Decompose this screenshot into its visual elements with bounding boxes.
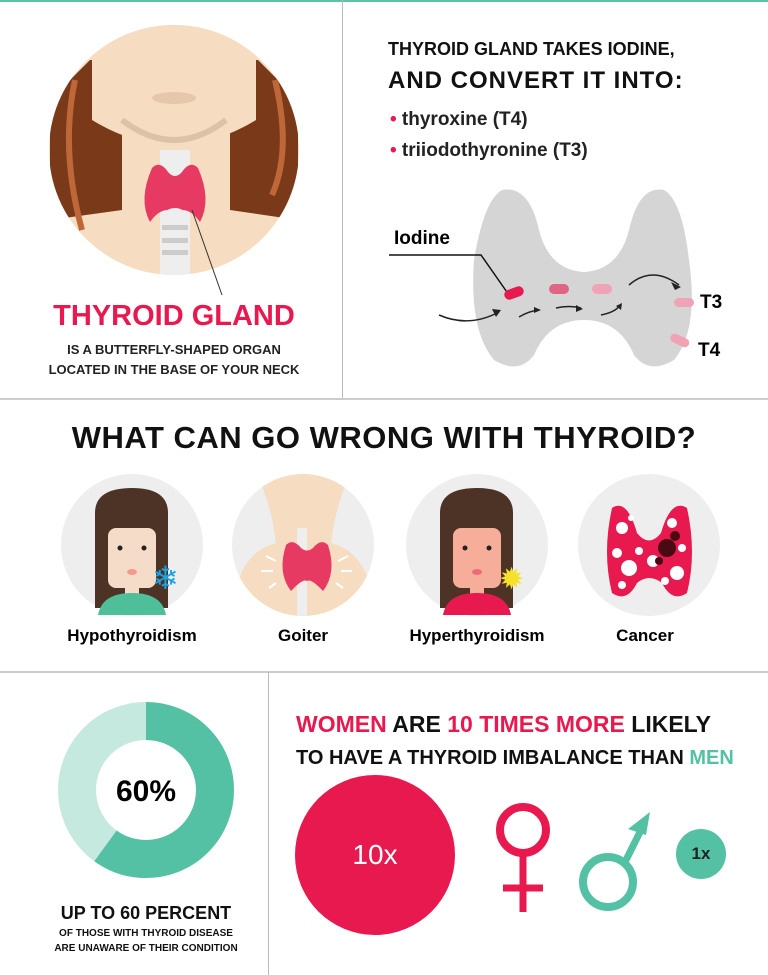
circle: 1x: 1x	[692, 844, 710, 863]
diagram: thyroid conversion: Iodine	[394, 228, 450, 249]
text: up to 60 percent: UP TO 60 PERCENT	[61, 903, 231, 923]
heading: women vs men	[296, 711, 734, 769]
heading: women vs men: TO HAVE A THYROID IMBALANCE THAN MEN	[296, 747, 734, 769]
icon: hypothyroidism	[61, 474, 203, 616]
text: description	[49, 342, 300, 377]
diagram: thyroid conversion: T4	[698, 340, 721, 361]
diagram: thyroid conversion: T3	[700, 292, 722, 313]
circle: 10x: 10x	[352, 839, 398, 870]
label: hyperthyroidism: Hyperthyroidism	[409, 626, 545, 645]
circle: 10x	[295, 775, 455, 935]
icon: hyperthyroidism: ✹	[499, 563, 524, 596]
heading: iodine conversion: AND CONVERT IT INTO:	[388, 67, 684, 94]
bullet list	[390, 109, 588, 161]
icon: female symbol	[496, 803, 550, 912]
diagram: thyroid conversion	[389, 190, 722, 366]
icon: cancer	[578, 474, 720, 616]
heading: iodine conversion	[388, 39, 684, 94]
heading: what can go wrong: WHAT CAN GO WRONG WITH THYROID?	[72, 420, 696, 455]
donut chart: 60%: 60%	[116, 775, 176, 808]
illustration: neck with thyroid	[49, 25, 299, 296]
icon: goiter	[232, 474, 374, 616]
bullet list: • thyroxine (T4)	[390, 109, 528, 130]
text: description: LOCATED IN THE BASE OF YOUR NECK	[49, 362, 299, 377]
bullet list: • triiodothyronine (T3)	[390, 140, 588, 161]
text: up to 60 percent: OF THOSE WITH THYROID DISEASE	[59, 928, 233, 939]
heading: women vs men: WOMEN ARE 10 TIMES MORE LIKELY	[296, 711, 711, 737]
title: thyroid gland: THYROID GLAND	[53, 300, 295, 332]
label: cancer: Cancer	[616, 626, 674, 645]
donut chart: 60%	[58, 702, 234, 878]
label: hypothyroidism: Hypothyroidism	[67, 626, 197, 645]
top teal line	[0, 0, 768, 2]
icon: hyperthyroidism	[406, 474, 548, 616]
text: up to 60 percent: ARE UNAWARE OF THEIR CONDITION	[54, 943, 238, 954]
heading: iodine conversion: THYROID GLAND TAKES IODINE,	[388, 39, 675, 59]
icon: hypothyroidism: ❄	[152, 560, 179, 596]
text: up to 60 percent	[54, 903, 238, 954]
text: description: IS A BUTTERFLY-SHAPED ORGAN	[67, 342, 281, 357]
icon: male symbol	[579, 812, 650, 911]
label: goiter: Goiter	[278, 626, 328, 645]
circle: 1x	[676, 829, 726, 879]
